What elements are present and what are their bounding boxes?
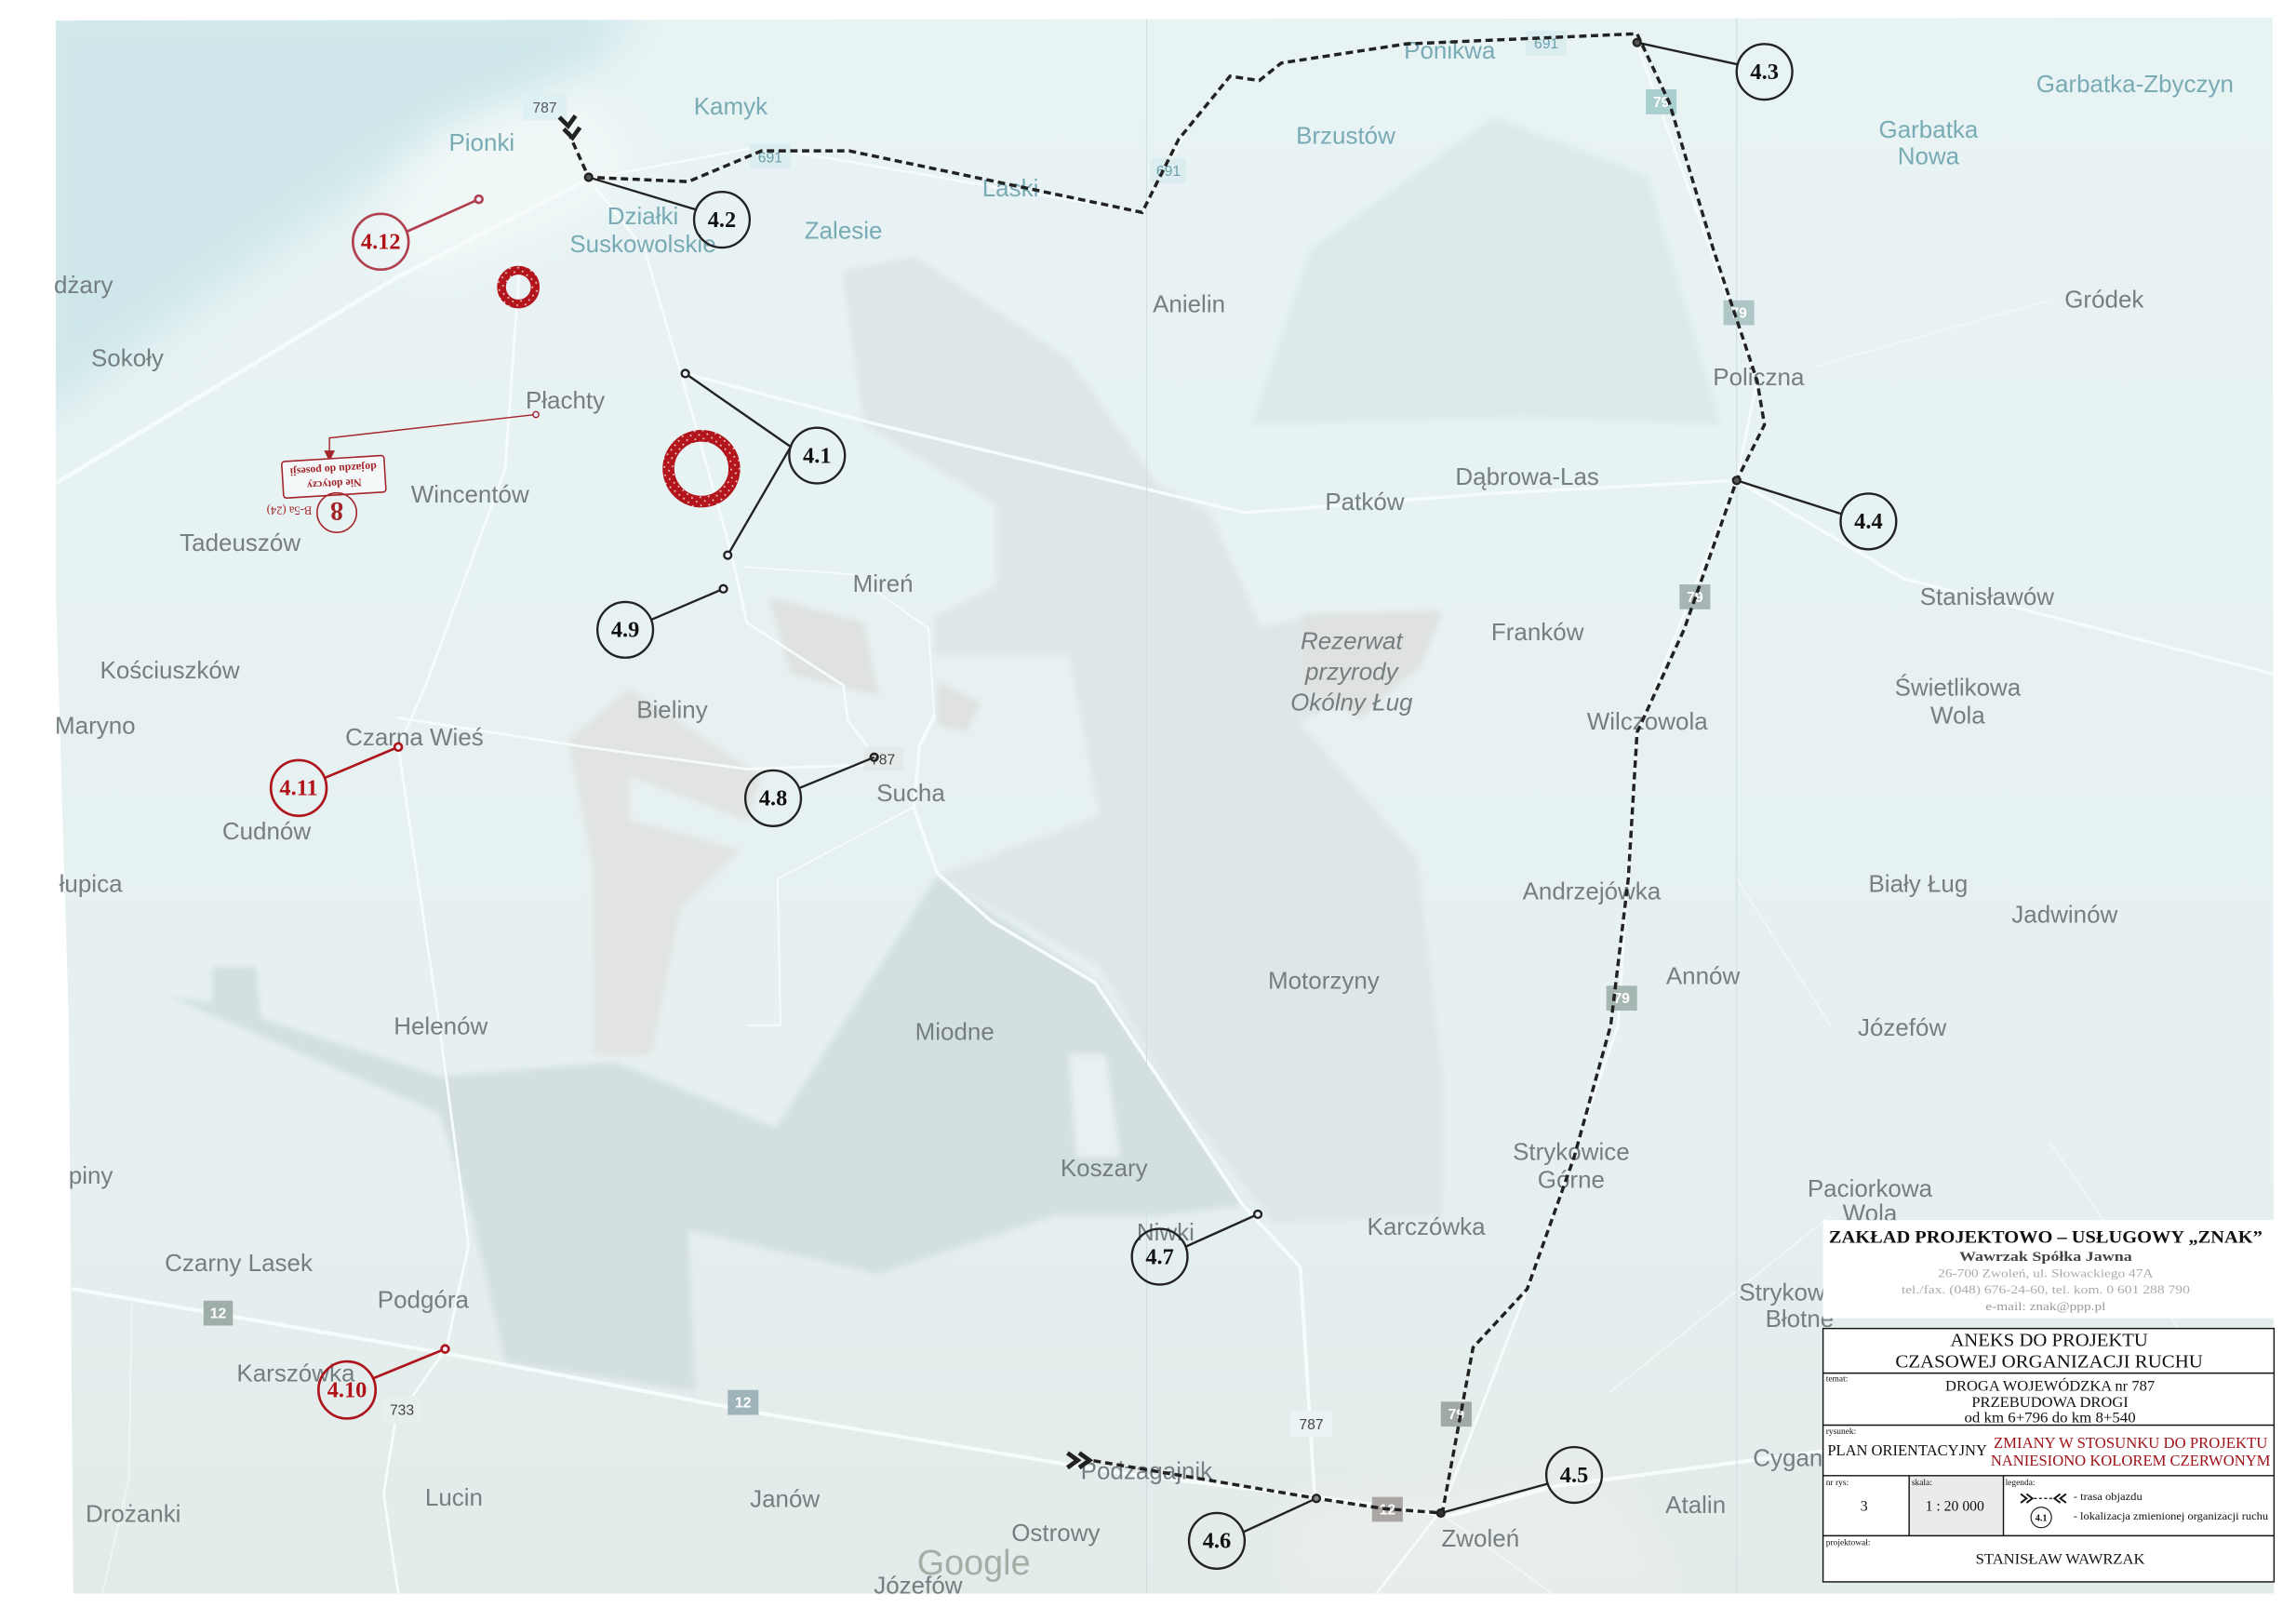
callout 4.8: 4.8 bbox=[759, 786, 787, 811]
grey village labels: łupica bbox=[60, 870, 123, 898]
callout 4.8 bbox=[745, 754, 878, 826]
subject cell bbox=[1826, 1374, 2155, 1426]
light settlement patch: Zwoleń bbox=[1288, 1465, 1684, 1594]
grey village labels: Bieliny bbox=[636, 695, 708, 723]
grey village labels: Stanisławów bbox=[1920, 583, 2054, 610]
detour route dashed line bbox=[568, 33, 1765, 1513]
callout 4.7 bbox=[1132, 1211, 1261, 1284]
shield 12 centre: 12 bbox=[735, 1396, 752, 1412]
legend cell: - lokalizacja zmienionej organizacji ruchu bbox=[2074, 1511, 2269, 1522]
drawing cell: PLAN ORIENTACYJNY bbox=[1827, 1441, 1987, 1459]
grey village labels: Koszary bbox=[1061, 1154, 1148, 1182]
grey village labels: Sokoły bbox=[91, 344, 164, 372]
red callout 4.12: 4.12 bbox=[361, 230, 401, 255]
grey village labels: Strykowice bbox=[1513, 1138, 1630, 1166]
callout 4.3 bbox=[1634, 39, 1793, 100]
grey village labels: Wincentów bbox=[411, 480, 529, 508]
subject cell: temat: bbox=[1826, 1374, 1848, 1384]
upside-down sign board bbox=[282, 455, 386, 498]
shield 79 Annów: 79 bbox=[1613, 991, 1630, 1007]
grey village labels: Niwki bbox=[1137, 1218, 1195, 1246]
red callout 4.11 bbox=[271, 744, 402, 816]
callout 4.1 bbox=[682, 369, 845, 559]
callout 4.9: 4.9 bbox=[611, 618, 639, 643]
grey village labels: Wola bbox=[1843, 1199, 1898, 1227]
shield 12 Zwoleń bbox=[1372, 1497, 1403, 1521]
grey village labels: Atalin bbox=[1665, 1491, 1726, 1519]
callout 4.5: 4.5 bbox=[1560, 1463, 1588, 1488]
fold lines bbox=[1146, 18, 1737, 1611]
designer cell: STANISŁAW WAWRZAK bbox=[1976, 1551, 2145, 1567]
shield 787 south: 787 bbox=[1299, 1417, 1324, 1433]
red callout 4.10: 4.10 bbox=[327, 1378, 367, 1403]
callout 4.9 bbox=[597, 585, 727, 658]
grey village labels: Cudnów bbox=[222, 817, 311, 845]
grey village labels: dżary bbox=[54, 271, 113, 299]
shield 733 bbox=[382, 1396, 421, 1424]
grey village labels: Wola bbox=[1930, 702, 1985, 730]
callout 4.6: 4.6 bbox=[1203, 1529, 1231, 1554]
callout 4.6 bbox=[1189, 1494, 1320, 1569]
grey village labels: Okólny Ług bbox=[1290, 688, 1413, 716]
callout 4.4 bbox=[1733, 476, 1896, 549]
grey village labels: Dąbrowa-Las bbox=[1455, 462, 1599, 490]
grey village labels: Kościuszków bbox=[100, 656, 240, 684]
grey village labels: Józefów bbox=[1858, 1013, 1946, 1041]
shield 79 bbox=[1646, 89, 1676, 114]
callout 4.7: 4.7 bbox=[1145, 1244, 1174, 1269]
grey village labels: Lucin bbox=[425, 1483, 483, 1511]
red callout 4.11: 4.11 bbox=[279, 776, 318, 801]
callout 4.5 bbox=[1437, 1447, 1602, 1517]
north west teal labels: Garbatka bbox=[1879, 115, 1979, 143]
north west teal labels: Kamyk bbox=[694, 92, 768, 120]
grey village labels: Motorzyny bbox=[1268, 966, 1380, 994]
title text: CZASOWEJ ORGANIZACJI RUCHU bbox=[1895, 1351, 2203, 1372]
grey village labels: Annów bbox=[1666, 962, 1740, 990]
title block bbox=[1823, 1329, 2274, 1582]
red hatched ring large bbox=[669, 435, 734, 502]
forest: north centre and east bbox=[842, 256, 1444, 1223]
company header: Wawrzak Spółka Jawna bbox=[1959, 1250, 2132, 1265]
grey village labels: Andrzejówka bbox=[1523, 877, 1662, 904]
upside-down sign board: Nie dotyczy bbox=[307, 476, 362, 492]
grey village labels: Ostrowy bbox=[1011, 1519, 1100, 1547]
callout 4.3: 4.3 bbox=[1750, 60, 1779, 85]
north west teal labels: Zalesie bbox=[805, 217, 882, 245]
light settlement patch: Pionki bbox=[411, 100, 601, 246]
legend cell: - trasa objazdu bbox=[2074, 1492, 2142, 1503]
north west teal labels: Laski bbox=[982, 174, 1038, 202]
shield 79: 79 bbox=[1653, 95, 1670, 111]
shield 691: 691 bbox=[758, 151, 782, 167]
north west teal labels: Pionki bbox=[448, 128, 514, 156]
company header: ZAKŁAD PROJEKTOWO – USŁUGOWY „ZNAK” bbox=[1829, 1228, 2263, 1248]
designer cell bbox=[1826, 1539, 2145, 1567]
north west teal labels: Brzustów bbox=[1296, 121, 1395, 149]
shield 691 east: 691 bbox=[1156, 164, 1181, 180]
arrow: detour start chevrons bbox=[559, 115, 580, 138]
grey village labels: Maryno bbox=[55, 712, 136, 740]
grey village labels: Zwoleń bbox=[1441, 1524, 1519, 1552]
grey village labels: przyrody bbox=[1304, 657, 1400, 685]
drawing number cell bbox=[1826, 1479, 1868, 1515]
shield 79 Policzna bbox=[1724, 301, 1755, 325]
north west teal labels: Garbatka-Zbyczyn bbox=[2036, 70, 2234, 98]
red sign note with leader arrow bbox=[267, 411, 539, 532]
drawing cell: rysunek: bbox=[1826, 1427, 1856, 1437]
upside-down sign board: dojazdu do posesji bbox=[289, 461, 377, 478]
grey village labels: Cygan bbox=[1753, 1444, 1822, 1472]
arrow: detour end chevrons bbox=[1067, 1453, 1089, 1467]
north west teal labels bbox=[448, 36, 2234, 258]
grey village labels: Biały Ług bbox=[1868, 870, 1968, 898]
company header bbox=[1823, 1220, 2274, 1319]
forest: north east bbox=[1252, 117, 1720, 424]
red callout 4.12 bbox=[353, 195, 483, 270]
callout 4.1: 4.1 bbox=[803, 443, 832, 468]
shield 12 west bbox=[204, 1301, 233, 1325]
shield 79 Zwoleń bbox=[1441, 1401, 1472, 1427]
grey village labels: Rezerwat bbox=[1301, 626, 1404, 654]
grey village labels: Podgóra bbox=[378, 1286, 470, 1314]
legend cell: legenda: bbox=[2006, 1479, 2036, 1488]
scale cell bbox=[1912, 1479, 1984, 1515]
shield 79 Stanisławów bbox=[1679, 584, 1710, 610]
callout 4.2: 4.2 bbox=[708, 208, 736, 233]
drawing number cell: 3 bbox=[1861, 1499, 1868, 1515]
title text: ANEKS DO PROJEKTU bbox=[1950, 1331, 2148, 1351]
road shields bbox=[204, 31, 1755, 1521]
upside-down sign number 8: B-5a (24) bbox=[267, 504, 312, 517]
shield 733: 733 bbox=[390, 1403, 414, 1419]
fields: near Mireń bbox=[768, 597, 1441, 732]
shield 79 Stanisławów: 79 bbox=[1687, 590, 1703, 606]
subject cell: DROGA WOJEWÓDZKA nr 787 bbox=[1945, 1377, 2155, 1395]
red hatched ring small bbox=[501, 270, 535, 304]
shield 12 Zwoleń: 12 bbox=[1380, 1503, 1395, 1519]
grey village labels: Płachty bbox=[526, 386, 605, 414]
shield 787 Sucha bbox=[864, 747, 903, 770]
grey village labels: Jadwinów bbox=[2011, 901, 2118, 929]
scale cell: skala: bbox=[1912, 1479, 1932, 1488]
grey village labels: Sucha bbox=[876, 779, 945, 807]
shield 79 Zwoleń: 79 bbox=[1448, 1407, 1464, 1423]
grey village labels: Karszówka bbox=[236, 1359, 355, 1387]
company header: e-mail: znak@ppp.pl bbox=[1985, 1300, 2106, 1313]
grey village labels: Wilczowola bbox=[1587, 707, 1708, 735]
grey village labels: Janów bbox=[750, 1485, 820, 1513]
shield 691 top: 691 bbox=[1534, 36, 1558, 52]
grey village labels: Karczówka bbox=[1368, 1212, 1486, 1240]
forest: south west band bbox=[168, 876, 1243, 1391]
shield 787 north bbox=[523, 94, 567, 120]
red callout 4.10 bbox=[318, 1346, 448, 1418]
legend cell: 4.1 bbox=[2036, 1514, 2048, 1524]
grey village labels: Strykow bbox=[1739, 1279, 1825, 1306]
callout 4.4: 4.4 bbox=[1854, 509, 1883, 534]
company header: tel./fax. (048) 676-24-60, tel. kom. 0 601 288 790 bbox=[1902, 1283, 2190, 1296]
grey village labels: Czarna Wieś bbox=[345, 723, 484, 751]
north west teal labels: Ponikwa bbox=[1404, 36, 1496, 64]
grey village labels: Anielin bbox=[1153, 289, 1225, 317]
grey village labels: Czarny Lasek bbox=[165, 1249, 314, 1277]
shield 787 Sucha: 787 bbox=[871, 753, 895, 769]
grey village labels bbox=[54, 271, 2144, 1600]
shield 691 top bbox=[1526, 31, 1567, 56]
designer cell: projektował: bbox=[1826, 1539, 1870, 1548]
grey village labels: Policzna bbox=[1713, 363, 1805, 391]
scale cell: 1 : 20 000 bbox=[1926, 1499, 1984, 1515]
shield 12 centre bbox=[728, 1390, 758, 1415]
drawing cell: ZMIANY W STOSUNKU DO PROJEKTU bbox=[1994, 1434, 2267, 1452]
grey village labels: Paciorkowa bbox=[1808, 1174, 1933, 1202]
leader arrow to sign bbox=[325, 411, 539, 460]
subject cell: PRZEBUDOWA DROGI bbox=[1971, 1394, 2129, 1411]
grey village labels: Mireń bbox=[853, 569, 914, 597]
grey village labels: Błotne bbox=[1766, 1305, 1834, 1333]
north west teal labels: Działki bbox=[607, 202, 678, 230]
legend cell bbox=[2006, 1479, 2269, 1528]
shield 787 south bbox=[1290, 1411, 1332, 1437]
shield 12 west: 12 bbox=[210, 1306, 227, 1322]
shield 79 Policzna: 79 bbox=[1730, 306, 1747, 322]
grey village labels: Patków bbox=[1325, 488, 1405, 516]
grey village labels: Tadeuszów bbox=[180, 529, 300, 556]
north west teal labels: Nowa bbox=[1898, 141, 1960, 169]
drawing number cell: nr rys: bbox=[1826, 1479, 1849, 1488]
water-tinted area north west bbox=[56, 20, 631, 411]
fields: west centre bbox=[568, 689, 761, 1054]
grey village labels: Franków bbox=[1491, 618, 1584, 646]
grey village labels: Górne bbox=[1538, 1166, 1605, 1194]
grey village labels: Gródek bbox=[2064, 286, 2144, 314]
shield 691 east bbox=[1151, 158, 1186, 183]
north west teal labels: Suskowolskie bbox=[569, 230, 716, 258]
grey village labels: Świetlikowa bbox=[1895, 674, 2022, 702]
clearing near Koszary bbox=[1069, 1054, 1120, 1157]
shield 691 bbox=[750, 143, 791, 168]
company header: 26-700 Zwoleń, ul. Słowackiego 47A bbox=[1938, 1267, 2154, 1280]
drawing cell bbox=[1826, 1427, 2271, 1469]
shield 787 north: 787 bbox=[532, 100, 557, 116]
grey village labels: Podzagajnik bbox=[1081, 1457, 1213, 1485]
shield 79 Annów bbox=[1607, 985, 1637, 1011]
title text bbox=[1895, 1331, 2203, 1372]
Google watermark: Google bbox=[917, 1544, 1031, 1583]
grey village labels: piny bbox=[69, 1161, 113, 1189]
upside-down sign number 8: 8 bbox=[330, 496, 343, 525]
grey village labels: Miodne bbox=[915, 1018, 994, 1046]
upside-down sign number 8 bbox=[267, 493, 356, 532]
grey village labels: Józefów bbox=[874, 1572, 963, 1600]
subject cell: od km 6+796 do km 8+540 bbox=[1964, 1409, 2136, 1426]
grey village labels: Drożanki bbox=[86, 1499, 180, 1527]
grey village labels: Helenów bbox=[394, 1011, 488, 1039]
callout 4.2 bbox=[585, 174, 750, 248]
drawing cell: NANIESIONO KOLOREM CZERWONYM bbox=[1991, 1452, 2271, 1469]
